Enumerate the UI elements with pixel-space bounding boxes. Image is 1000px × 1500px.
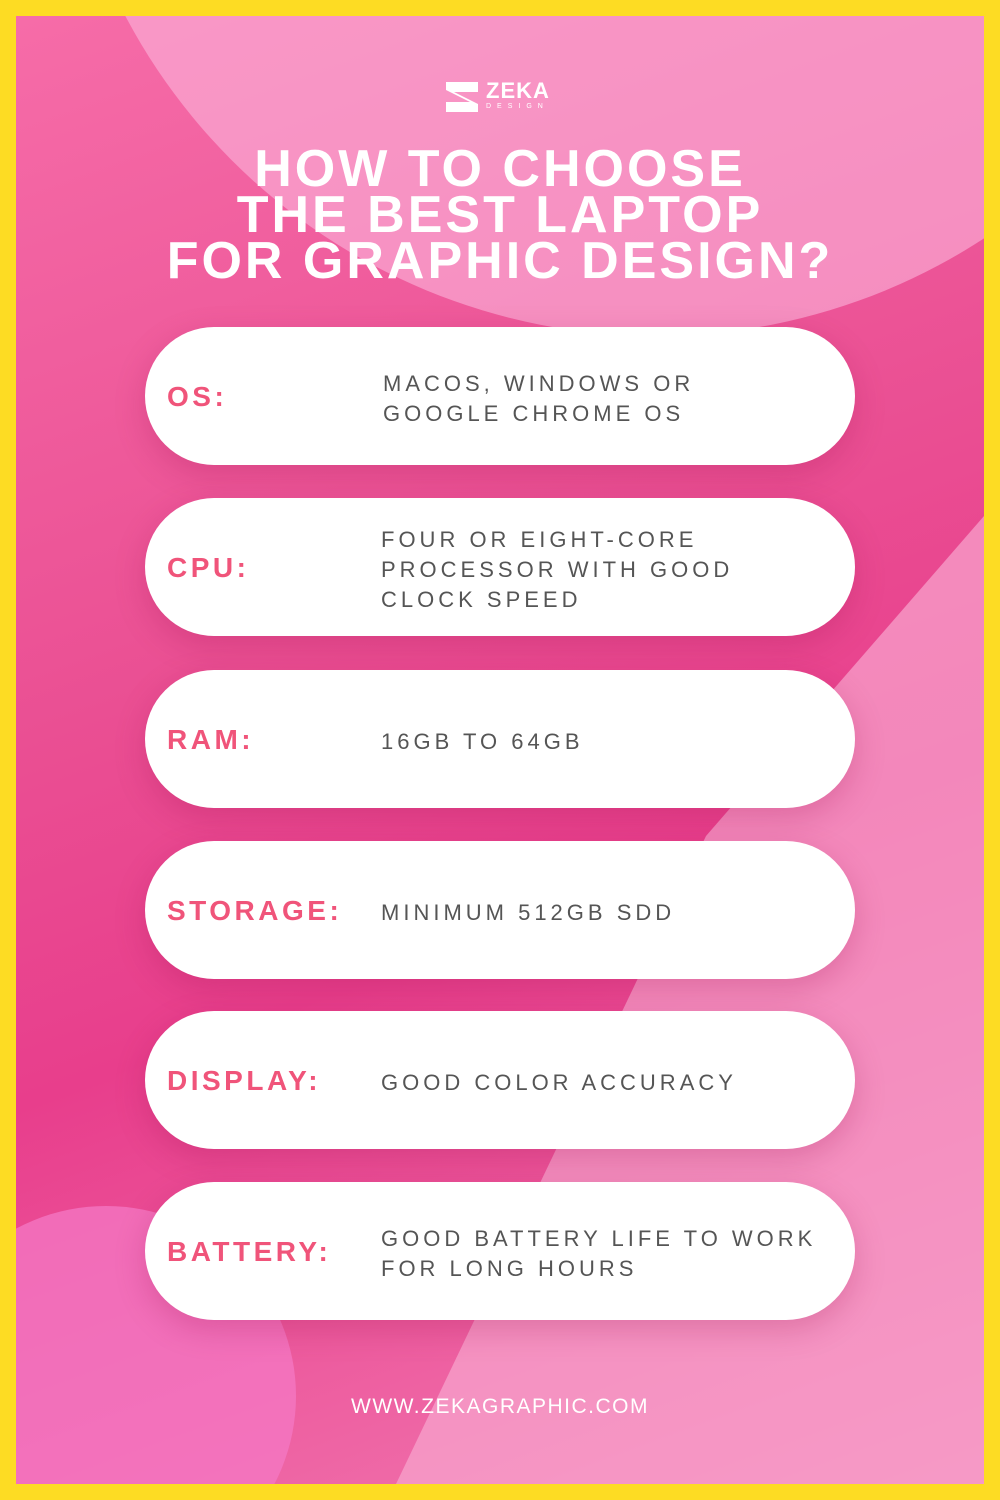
logo <box>446 78 550 112</box>
card: battery: GOOD BATTERY LIFE TO WORK <box>381 1226 816 1250</box>
card: CPU <box>145 498 855 636</box>
card: OS: OS: <box>167 381 227 412</box>
icon: logo mark <box>446 82 478 112</box>
card: CPU: PROCESSOR WITH GOOD <box>381 556 733 582</box>
card: RAM: 16GB TO 64GB <box>381 728 584 754</box>
card: display <box>145 1011 855 1149</box>
card: display: GOOD COLOR ACCURACY <box>381 1070 737 1094</box>
card: RAM: RAM: <box>167 724 254 755</box>
card: CPU: FOUR OR EIGHT-CORE <box>381 526 697 552</box>
card: battery <box>145 1182 855 1320</box>
card: OS: GOOGLE CHROME OS <box>383 400 684 426</box>
card: storage: MINIMUM 512GB SDD <box>381 900 675 924</box>
title: THE BEST LAPTOP <box>237 186 763 244</box>
card: CPU: CLOCK SPEED <box>381 586 582 612</box>
title <box>167 140 833 290</box>
card: storage: STORAGE: <box>167 895 342 926</box>
card: CPU: CPU: <box>167 552 249 583</box>
card: OS <box>145 327 855 465</box>
title: FOR GRAPHIC DESIGN? <box>167 232 833 290</box>
card: display: DISPLAY: <box>167 1065 321 1096</box>
card: storage <box>145 841 855 979</box>
card: battery: BATTERY: <box>167 1236 331 1267</box>
logo text: DESIGN <box>486 103 549 110</box>
card: OS: MACOS, WINDOWS OR <box>383 370 694 396</box>
logo text: ZEKA <box>486 78 550 103</box>
card: battery: FOR LONG HOURS <box>381 1256 637 1280</box>
footer url: WWW.ZEKAGRAPHIC.COM <box>351 1395 649 1418</box>
card: RAM <box>145 670 855 808</box>
title: HOW TO CHOOSE <box>254 140 746 198</box>
